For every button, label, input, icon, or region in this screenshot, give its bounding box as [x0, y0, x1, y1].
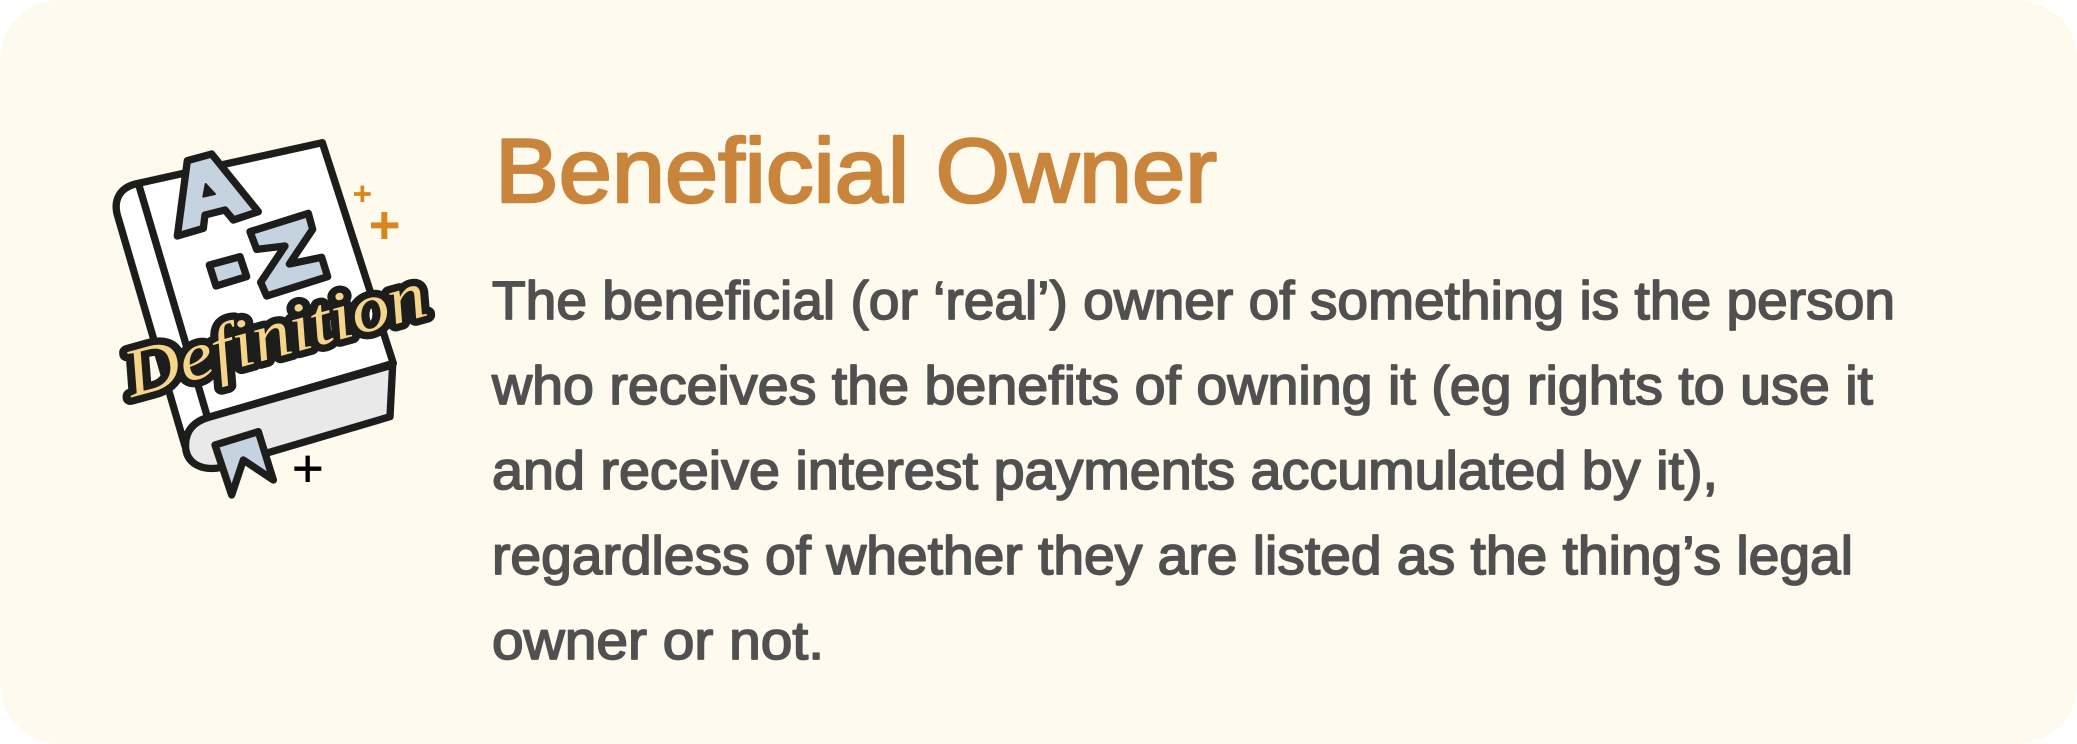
letter Z	[250, 213, 328, 296]
bookmark	[215, 432, 273, 495]
body text: The beneficial (or ‘real’) owner of something is the person	[492, 271, 1895, 331]
book spine line	[138, 183, 207, 417]
title: Beneficial Owner	[495, 121, 1217, 222]
body text	[491, 271, 1895, 671]
body text: owner or not.	[492, 611, 824, 671]
definition lettering: Definition	[114, 256, 434, 412]
icon: definition book	[114, 143, 434, 495]
sparkle: small orange plus	[354, 186, 371, 202]
hyphen	[209, 257, 247, 286]
book pages	[186, 365, 393, 468]
definition lettering: Definition	[114, 256, 434, 412]
letter A	[177, 154, 258, 236]
body text: regardless of whether they are listed as the thing’s legal	[492, 526, 1853, 586]
sparkle: large orange plus	[371, 212, 398, 239]
body text: and receive interest payments accumulated by it),	[492, 441, 1718, 501]
body text: who receives the benefits of owning it (eg rights to use it	[491, 356, 1873, 416]
sparkle: black plus	[294, 456, 321, 482]
book cover	[116, 143, 393, 446]
